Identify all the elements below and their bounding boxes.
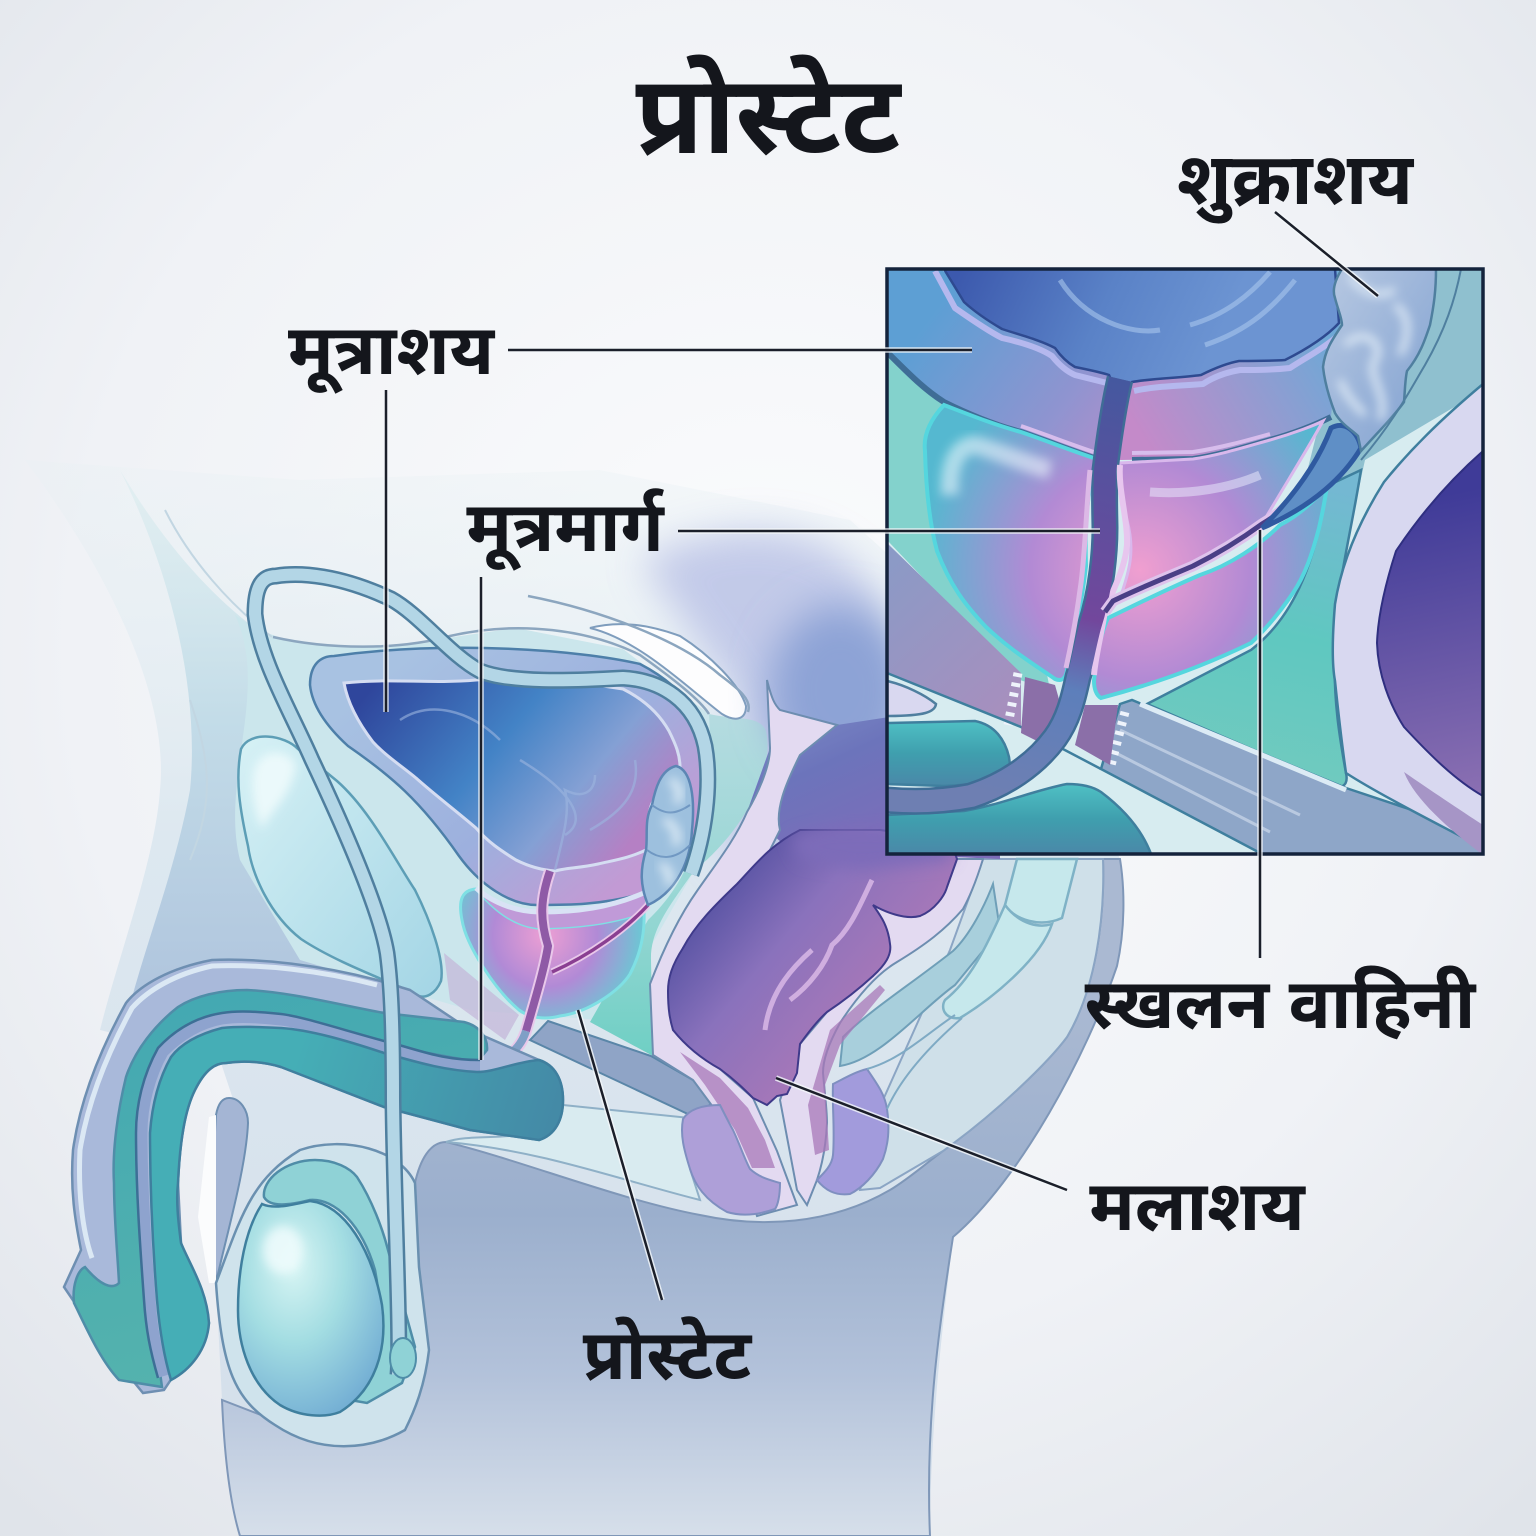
inset ejaculatory duct bbox=[1103, 515, 1271, 614]
vas deferens fill bbox=[255, 575, 708, 1375]
penis bbox=[64, 960, 563, 1393]
inset lobe highlight bbox=[1150, 475, 1260, 493]
bladder wall bbox=[310, 648, 710, 905]
rectal walls bbox=[650, 605, 1000, 1216]
lower erectile tissue bbox=[150, 1027, 563, 1380]
urethra bbox=[480, 871, 550, 1065]
inset upper right space bbox=[1308, 270, 1482, 482]
penis outer bbox=[64, 960, 563, 1393]
lavender left wall bbox=[650, 680, 837, 1216]
urethra lower curve bbox=[478, 1031, 526, 1066]
pubic bone highlight bbox=[252, 752, 296, 830]
scrotal fold bbox=[214, 1098, 248, 1283]
muscle wedge left bbox=[680, 1052, 775, 1168]
inset duct bulb bbox=[1262, 425, 1361, 528]
vesicle highlights bbox=[660, 780, 679, 885]
inset prostate right lobe bottom bbox=[1094, 486, 1327, 698]
penis inner pale line bbox=[80, 966, 377, 1258]
bladder bbox=[310, 648, 710, 905]
inset muscle band stripes bbox=[1110, 730, 1300, 832]
inset base bbox=[887, 269, 1483, 854]
bladder folds bbox=[400, 710, 636, 870]
title: प्रोस्टेट bbox=[636, 53, 902, 177]
bladder lumen bbox=[344, 679, 680, 871]
inset sphincter left bbox=[1021, 677, 1059, 740]
leader lines bbox=[386, 212, 1378, 1300]
peritoneal line bbox=[273, 596, 749, 714]
inset rectum bbox=[1377, 451, 1483, 796]
inset lower bulb bbox=[887, 784, 1151, 854]
inset vesicle outer line bbox=[1361, 269, 1461, 460]
prostate bbox=[461, 871, 648, 1065]
inset bladder lumen lining bbox=[935, 271, 1342, 391]
urethra in penis bbox=[142, 1017, 480, 1376]
upper rectal glow bbox=[770, 605, 910, 775]
inset vesicle folds bbox=[1340, 275, 1407, 420]
leader halos bbox=[386, 212, 1378, 1300]
vesicle lobes bbox=[647, 805, 690, 857]
inset lavender oval bbox=[887, 681, 936, 716]
ejaculatory duct bbox=[552, 905, 648, 972]
inset prostate highlights bbox=[950, 445, 1050, 495]
prostate capsule fill bbox=[476, 888, 646, 928]
inset prostate right lobe top bbox=[1119, 421, 1323, 598]
vas deferens outline bbox=[255, 575, 708, 1375]
inset urethra lining upper bbox=[1094, 465, 1127, 675]
inset right muscle band bbox=[1101, 700, 1483, 854]
inset bladder wall right bbox=[1120, 270, 1345, 460]
inset rectal wall bbox=[1333, 384, 1483, 848]
epididymis tail bbox=[390, 1338, 416, 1378]
inset seminal vesicle bbox=[1323, 269, 1461, 460]
inset urethra outline bbox=[887, 379, 1120, 801]
white pocket bbox=[590, 624, 746, 719]
pubic bone bbox=[238, 737, 442, 997]
rectum lumen bbox=[668, 830, 957, 1105]
seminal vesicle bbox=[642, 766, 693, 905]
lower body and buttock band bbox=[222, 859, 1123, 1536]
label: ejaculatory duct: स्खलन वाहिनी bbox=[1085, 965, 1477, 1043]
upper rectal mass bbox=[747, 700, 1000, 859]
upper erectile tissue bbox=[74, 990, 487, 1387]
right sphincter bbox=[817, 1069, 888, 1194]
spine bbox=[943, 859, 1077, 1018]
inset rectal sliver bbox=[1404, 772, 1483, 855]
muscle wedge right bbox=[808, 985, 885, 1155]
urethra outline bbox=[136, 1011, 480, 1378]
inset prostate left lobe bbox=[925, 405, 1097, 680]
buttock inner area bbox=[860, 859, 1103, 1190]
abdominal wisps bbox=[165, 510, 272, 860]
inset wall lining bbox=[1021, 426, 1270, 453]
label: rectum: मलाशय bbox=[1089, 1167, 1306, 1245]
coccyx recess bbox=[840, 884, 1000, 1066]
inset frame bbox=[887, 269, 1483, 854]
testis highlight bbox=[263, 1226, 303, 1274]
perivesical space bbox=[235, 615, 766, 1020]
inset ejaculatory duct lining bbox=[1100, 504, 1280, 616]
epididymis bbox=[264, 1160, 415, 1403]
inset left teal bbox=[887, 345, 1050, 690]
coccyx ligaments bbox=[867, 1015, 962, 1109]
rectum highlights bbox=[765, 880, 872, 1030]
label: bladder: मूत्राशय bbox=[288, 311, 496, 394]
teal pelvic space bbox=[590, 714, 768, 1056]
label: seminal vesicle: शुक्राशय bbox=[1177, 140, 1414, 224]
inset bladder lumen bbox=[944, 270, 1340, 384]
inset muscle dashes left bbox=[1008, 673, 1018, 725]
label: urethra: मूत्रमार्ग bbox=[466, 488, 665, 571]
inset wall boundary bbox=[887, 352, 1331, 460]
inset muscle pale edge bbox=[1140, 704, 1346, 790]
label: prostate: प्रोस्टेट bbox=[583, 1315, 753, 1394]
inset urethra fill bbox=[887, 379, 1120, 801]
muscle stripes near prostate bbox=[444, 953, 519, 1040]
ejaculatory duct core bbox=[552, 905, 648, 972]
inset bladder highlights bbox=[1060, 272, 1295, 345]
haze behind the pelvis bbox=[640, 531, 900, 860]
rectum top blend bbox=[790, 826, 950, 870]
inset muscle dashes right bbox=[1110, 712, 1125, 769]
anatomical cross-section bbox=[25, 460, 1123, 1536]
inset left muscle bbox=[887, 543, 1021, 727]
inset upper bulb bbox=[887, 721, 1011, 786]
testis bbox=[238, 1201, 383, 1416]
inset diagonal edge bbox=[887, 673, 1101, 769]
scrotum bbox=[216, 1144, 429, 1446]
inset urethra lining left bbox=[1066, 470, 1090, 668]
lavender right wall bbox=[780, 859, 983, 1205]
pale band under bulb bbox=[446, 1105, 700, 1200]
inset: prostate detail bbox=[887, 269, 1483, 855]
body silhouette bbox=[25, 460, 1123, 1536]
prostate capsule line bbox=[476, 888, 646, 912]
leader strokes bbox=[386, 212, 1378, 1300]
inset teal wedge bbox=[1147, 470, 1361, 787]
urethra core bbox=[526, 871, 550, 1031]
pelvic floor band bbox=[530, 1021, 720, 1115]
inset bladder wall left bbox=[887, 269, 1120, 460]
white sliver bbox=[198, 1115, 216, 1283]
left sphincter bbox=[682, 1105, 780, 1215]
inset sphincter right bbox=[1075, 705, 1118, 765]
abdominal wall band bbox=[115, 470, 384, 1090]
